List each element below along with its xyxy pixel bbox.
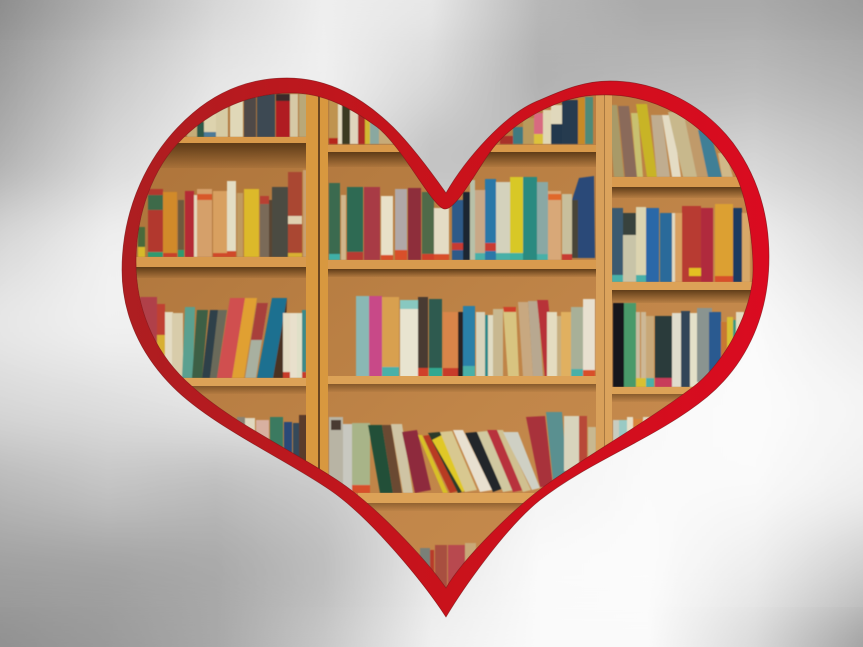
bookshelf clipped to the heart	[136, 93, 753, 588]
second row books	[138, 170, 750, 282]
top row books	[187, 94, 733, 177]
third row books	[140, 296, 744, 387]
fourth row books	[237, 412, 650, 595]
heart outline: red frame of varying thickness	[122, 78, 769, 617]
shelf boards	[130, 137, 770, 503]
shelf back panel	[136, 93, 753, 588]
shelf undersides in shadow	[130, 143, 772, 511]
vertical shelf posts	[306, 94, 612, 474]
